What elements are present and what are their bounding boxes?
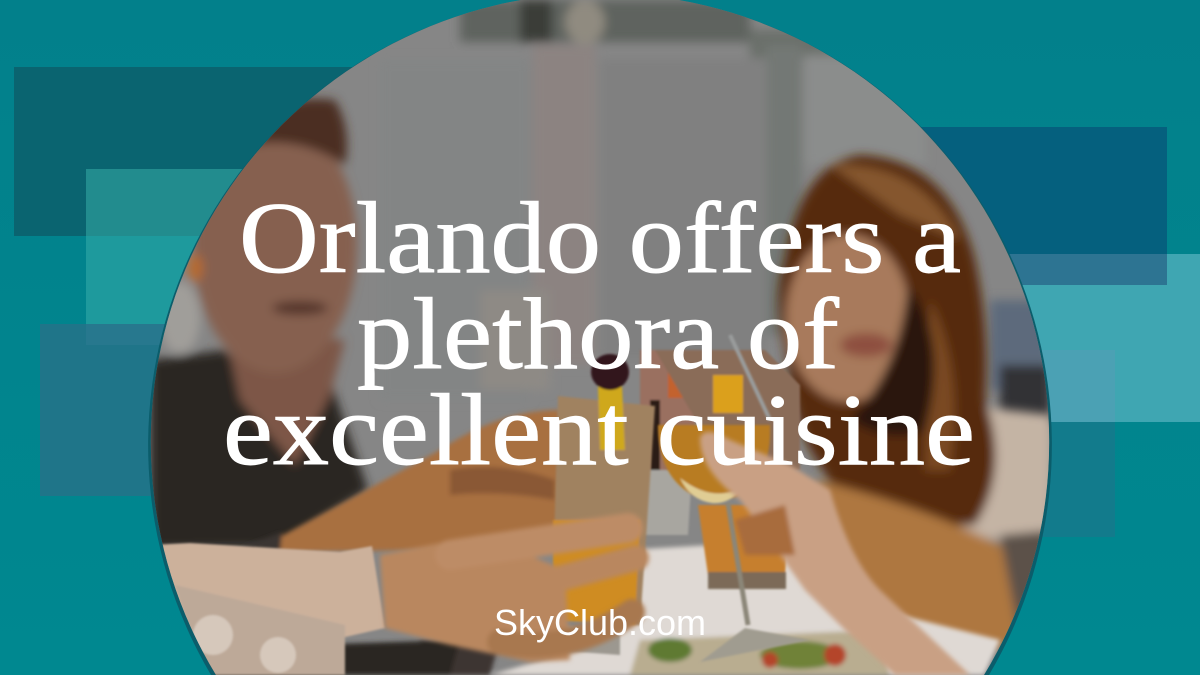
wine glass bbox=[658, 335, 810, 662]
front hand bbox=[380, 528, 636, 662]
circle border bbox=[148, 0, 1052, 675]
title bbox=[223, 182, 975, 487]
restaurant background bbox=[456, 0, 1048, 424]
woman bbox=[778, 155, 1052, 650]
man bbox=[150, 99, 368, 550]
title: Orlando offers a bbox=[239, 182, 961, 295]
background rectangles, left bbox=[14, 67, 414, 496]
sleeve bbox=[150, 543, 385, 675]
photo base tone bbox=[148, 0, 1052, 675]
front glass with cherry bbox=[550, 354, 655, 655]
table and plate bbox=[150, 540, 1000, 675]
title: excellent cuisine bbox=[223, 374, 975, 487]
back drinks bbox=[640, 350, 800, 589]
title: plethora of bbox=[357, 278, 839, 391]
man's arm and hand bbox=[240, 410, 560, 552]
photo in circle: friends toasting drinks bbox=[148, 0, 1052, 675]
source label: SkyClub.com bbox=[494, 602, 706, 643]
woman's hand bbox=[700, 432, 970, 675]
background rectangles, right bbox=[900, 127, 1200, 537]
